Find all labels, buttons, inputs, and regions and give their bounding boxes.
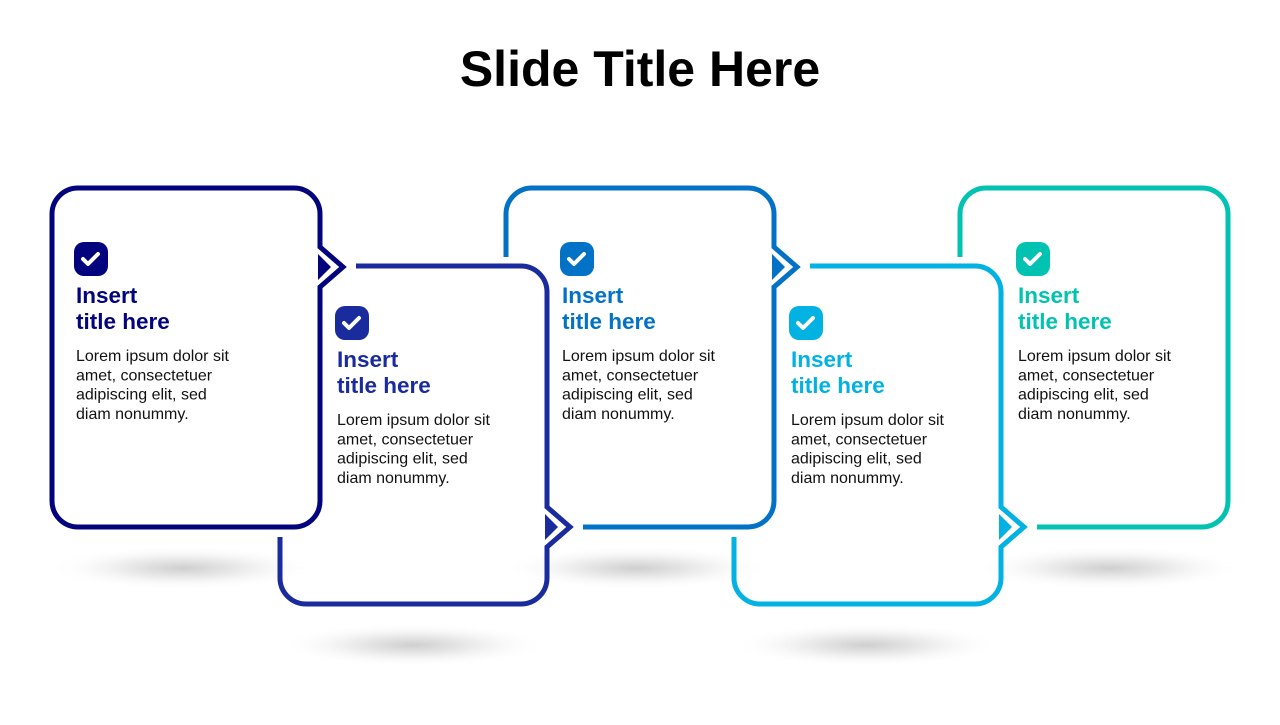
- text block: amet, consectetuer: [337, 431, 474, 448]
- text block: amet, consectetuer: [791, 431, 928, 448]
- panel: step 1: [52, 188, 343, 527]
- text block: Lorem ipsum dolor sit: [337, 412, 490, 429]
- text block: adipiscing elit, sed: [1018, 387, 1149, 404]
- text block: diam nonummy.: [791, 470, 904, 487]
- heading: title here: [76, 309, 170, 334]
- text block: Lorem ipsum dolor sit: [791, 412, 944, 429]
- heading: Insert: [791, 347, 853, 372]
- icon: check: [74, 242, 108, 276]
- icon: check: [1016, 242, 1050, 276]
- heading: Insert: [562, 283, 624, 308]
- text block: adipiscing elit, sed: [76, 387, 207, 404]
- heading: Insert: [337, 347, 399, 372]
- panel: step 2: [280, 266, 570, 604]
- icon: check: [335, 306, 369, 340]
- icon: check: [789, 306, 823, 340]
- text block: Lorem ipsum dolor sit: [1018, 348, 1172, 365]
- text block: Lorem ipsum dolor sit: [76, 348, 230, 365]
- text block: diam nonummy.: [562, 406, 675, 423]
- icon: check: [560, 242, 594, 276]
- heading: title here: [337, 373, 431, 398]
- panel: step 5: [960, 188, 1228, 527]
- text block: adipiscing elit, sed: [562, 387, 693, 404]
- heading: title here: [791, 373, 885, 398]
- panel: step 4: [734, 266, 1024, 604]
- text block: adipiscing elit, sed: [337, 451, 468, 468]
- heading: title here: [562, 309, 656, 334]
- text block: diam nonummy.: [76, 406, 189, 423]
- text block: diam nonummy.: [337, 470, 450, 487]
- panel: step 3: [506, 188, 797, 527]
- heading: title here: [1018, 309, 1112, 334]
- text block: amet, consectetuer: [562, 367, 699, 384]
- heading: Insert: [1018, 283, 1080, 308]
- text block: diam nonummy.: [1018, 406, 1131, 423]
- text block: amet, consectetuer: [1018, 367, 1155, 384]
- text block: adipiscing elit, sed: [791, 451, 922, 468]
- heading: Insert: [76, 283, 138, 308]
- shadows: [48, 546, 1245, 667]
- text block: Lorem ipsum dolor sit: [562, 348, 716, 365]
- title: Slide Title Here: [460, 41, 820, 97]
- text block: amet, consectetuer: [76, 367, 213, 384]
